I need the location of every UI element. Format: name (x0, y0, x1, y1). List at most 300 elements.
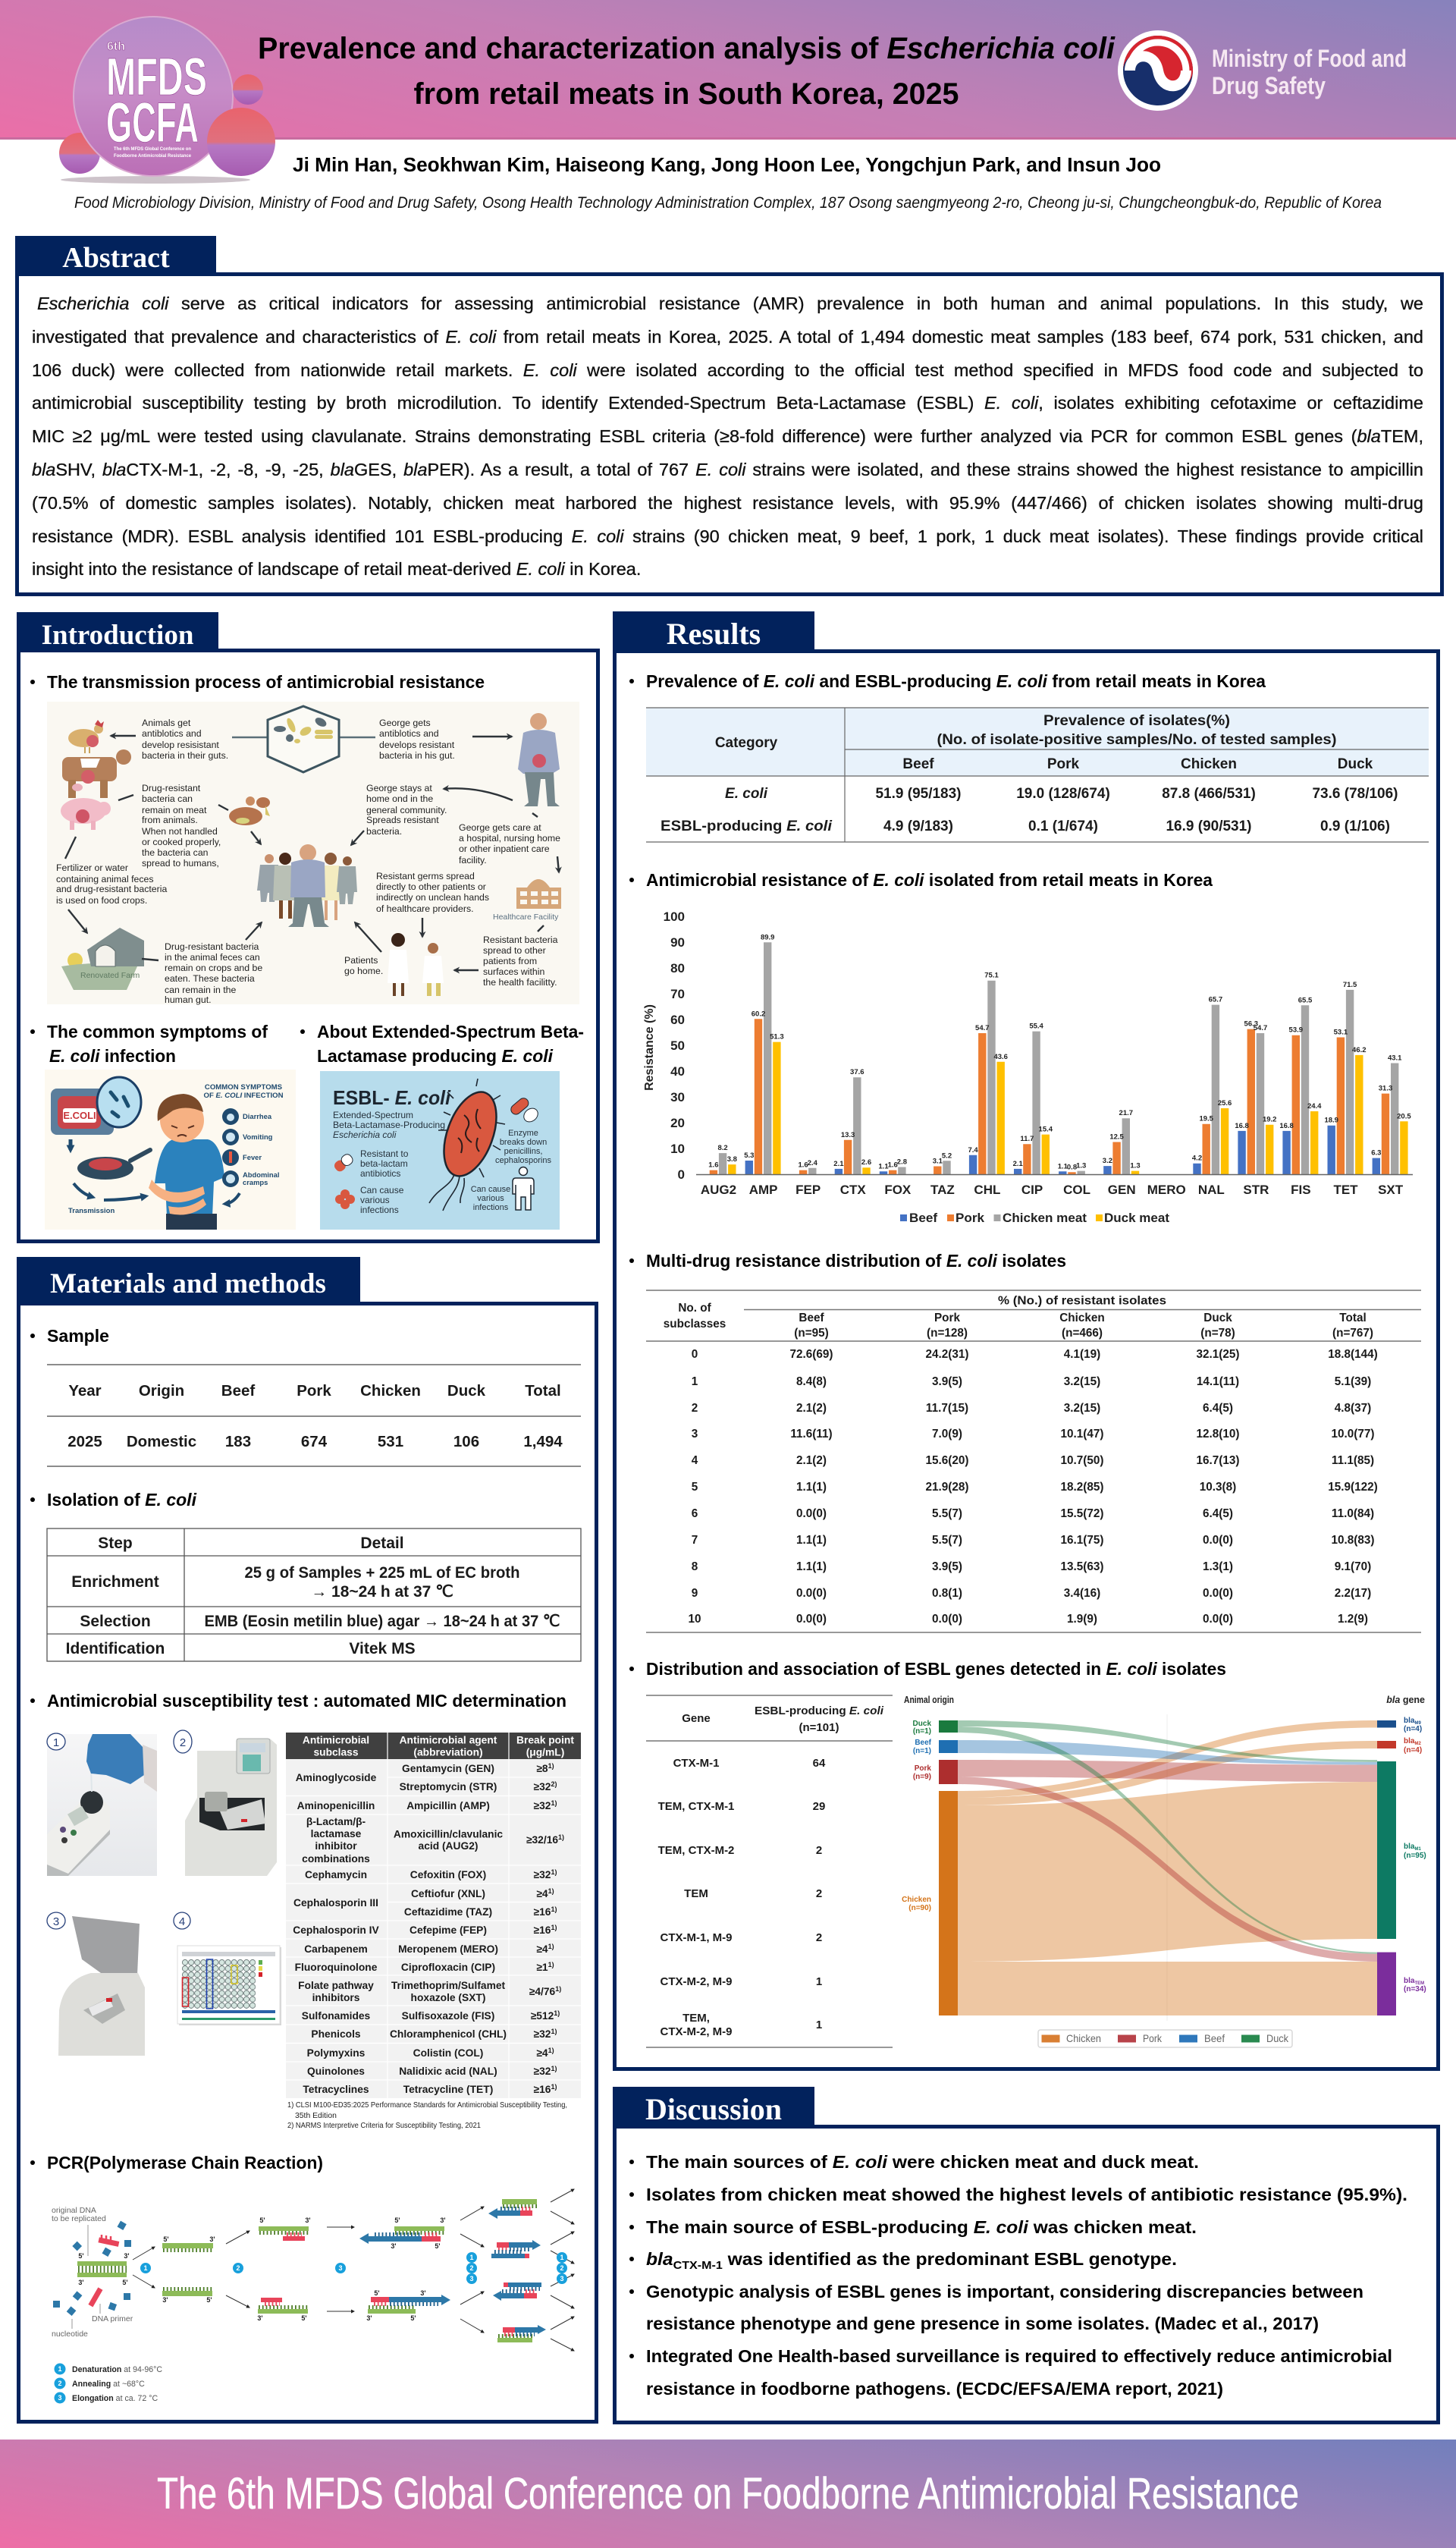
value labels: 1.1 (878, 1162, 889, 1170)
table: multi-drug resistance distribution: 24.2(31) (926, 1348, 968, 1361)
sankey left labels: (n=90) (908, 1904, 931, 1912)
symptoms list: Abdominal (243, 1170, 279, 1179)
category labels: CIP (1021, 1183, 1043, 1197)
table: ESBL genes: 2 (816, 1931, 822, 1944)
table: antimicrobial break points: ≥16 (534, 2084, 551, 2095)
table footnotes: 35th Edition (295, 2112, 337, 2120)
table: ESBL genes: 1 (816, 1975, 822, 1988)
sankey titles: bla gene (1386, 1695, 1425, 1705)
table: multi-drug resistance distribution: 3.2(15) (1064, 1402, 1100, 1415)
table: multi-drug resistance distribution: 5.1(39) (1335, 1375, 1371, 1388)
captions: transmission steps: George gets (379, 718, 431, 728)
table: prevalence of isolates: (No. of isolate-positive samples/No. of tested samples) (937, 732, 1336, 748)
table: prevalence of isolates: 73.6 (78/106) (1312, 786, 1398, 802)
category labels: MERO (1147, 1183, 1186, 1197)
value labels: 5.3 (744, 1151, 754, 1160)
value labels: 16.8 (1235, 1122, 1249, 1130)
value labels: 19.5 (1199, 1115, 1214, 1123)
table: multi-drug resistance distribution: Total (1339, 1312, 1367, 1324)
sankey right labels: bla (1404, 1737, 1414, 1745)
strand end labels: 5' (78, 2252, 84, 2260)
photo 2: sensititre dispenser (174, 1730, 277, 1876)
table: multi-drug resistance distribution: No. of (678, 1302, 712, 1315)
table: multi-drug resistance distribution: 11.0(84) (1332, 1507, 1374, 1520)
strand end labels: 5' (435, 2242, 441, 2250)
captions: transmission steps: When not handled (142, 826, 218, 837)
table: sample: Beef (221, 1382, 255, 1400)
PCR labels (52, 2206, 133, 2339)
DNA teeth: green (78, 2206, 537, 2336)
table: isolation steps: Identification (66, 1640, 165, 1657)
abstract text: MIC ≥2 μg/mL were tested using clavulanate. Strains demonstrating ESBL criteria (≥8-fold difference) were further analyzed via PCR for common ESBL genes (blaTEM, (32, 426, 1423, 446)
sankey left labels: Pork (915, 1764, 931, 1773)
authors: Ji Min Han, Seokhwan Kim, Haiseong Kang, Jong Hoon Lee, Yongchjun Park, and Insun Joo (293, 155, 1161, 176)
category labels: STR (1243, 1183, 1269, 1197)
abstract text: resistance (MDR). ESBL analysis identified 101 ESBL-producing E. coli strains (90 chicken meat, 9 beef, 1 pork, 1 duck meat isolates). These findings provide critical (32, 526, 1423, 546)
step badges: 3 (469, 2275, 474, 2283)
table: sample: Origin (139, 1382, 184, 1400)
table: antimicrobial break points: Phenicols (311, 2028, 361, 2040)
sankey right labels: M1 (1414, 1847, 1421, 1852)
PCR legend: Elongation at ca. 72 °C (72, 2394, 158, 2403)
table: antimicrobial break points: Gentamycin (GEN) (402, 1763, 494, 1774)
table: antimicrobial break points: 1) (548, 2047, 554, 2054)
icon: healthcare facility: Healthcare Facility (493, 913, 559, 922)
table: multi-drug resistance distribution: Beef (799, 1312, 824, 1324)
value labels: 6.3 (1371, 1149, 1381, 1158)
sankey right labels: bla (1404, 1717, 1414, 1725)
strand end labels: 3' (420, 2289, 426, 2297)
value labels: 2.4 (808, 1159, 818, 1167)
logo: conference wordmark (106, 40, 207, 159)
table: multi-drug resistance distribution: 11.1(85) (1332, 1454, 1374, 1467)
table: multi-drug resistance distribution: 0.0(0) (796, 1507, 827, 1520)
table: multi-drug resistance distribution: 6.4(5) (1203, 1507, 1233, 1520)
chart legend: Chicken meat (1003, 1211, 1087, 1225)
table: antimicrobial break points: 1) (548, 1943, 554, 1950)
icon: cow (62, 749, 131, 798)
logo: globe (74, 17, 233, 176)
value labels: 53.1 (1334, 1029, 1348, 1036)
number badge 2 (174, 1730, 192, 1753)
ESBL definition (333, 1110, 445, 1140)
value labels: 60.2 (752, 1010, 765, 1018)
table: antimicrobial break points: ≥32 (534, 1781, 551, 1792)
table: multi-drug resistance distribution: 9.1(70) (1335, 1560, 1371, 1573)
table: multi-drug resistance distribution: (n=128) (927, 1327, 968, 1340)
captions: transmission steps: can remain in the (165, 985, 236, 995)
value labels (708, 933, 1411, 1171)
icon: pills (509, 1096, 541, 1125)
table: multi-drug resistance distribution: 0.0(0) (796, 1587, 827, 1600)
photo 3: sensititre reader (47, 1912, 145, 2056)
sankey right labels: bla (1404, 1843, 1414, 1851)
table: multi-drug resistance distribution: 0.0(0) (1203, 1587, 1233, 1600)
value labels: 21.7 (1119, 1109, 1133, 1117)
panel: discussion (613, 2087, 1438, 2423)
value labels: 3.8 (727, 1155, 737, 1164)
table: multi-drug resistance distribution (646, 1290, 1421, 1632)
table: multi-drug resistance distribution: 8.4(8) (796, 1375, 827, 1388)
table: multi-drug resistance distribution: 4.1(19) (1064, 1348, 1100, 1361)
value labels: 53.9 (1289, 1026, 1303, 1035)
table: multi-drug resistance distribution: 2.1(2) (796, 1454, 827, 1467)
captions: transmission steps: or cooked properly, (142, 837, 221, 847)
step badges: 1 (560, 2254, 564, 2261)
ESBL right captions: breaks down (500, 1138, 547, 1147)
table: antimicrobial break points: ≥4/76 (529, 1986, 555, 1997)
y axis labels: 20 (670, 1116, 685, 1130)
table: antimicrobial break points: ≥512 (531, 2010, 554, 2022)
value labels: 37.6 (850, 1068, 864, 1076)
strand end labels: 5' (122, 2279, 128, 2286)
symptoms list: Vomiting (243, 1133, 273, 1141)
table: antimicrobial break points: 1) (548, 1961, 554, 1968)
value labels: 65.7 (1209, 996, 1222, 1004)
table: antimicrobial break points: Cephalosporin IV (293, 1924, 380, 1936)
title: from retail meats in South Korea, 2025 (414, 77, 959, 111)
ministry name: Ministry of Food and (1212, 45, 1407, 72)
table: antimicrobial break points: Amoxicillin/clavulanic (394, 1828, 503, 1840)
ESBL left captions: infections (360, 1205, 399, 1215)
sankey right labels: (n=4) (1404, 1746, 1422, 1755)
value labels: 46.2 (1352, 1046, 1367, 1054)
sankey right labels: bla (1404, 1977, 1414, 1985)
abstract text: insight into the resistance of landscape of retail meat-derived E. coli in Korea. (32, 559, 641, 579)
table: sample: Domestic (127, 1433, 196, 1450)
table: antimicrobial break points: Break point (516, 1734, 574, 1746)
sankey right labels: M9 (1414, 1721, 1421, 1726)
table: multi-drug resistance distribution: Pork (934, 1312, 960, 1324)
table: ESBL genes: TEM, (682, 2012, 710, 2025)
captions: transmission steps: patients from (483, 956, 537, 966)
table: multi-drug resistance distribution: 1 (692, 1375, 698, 1388)
table: prevalence of isolates: Category (715, 735, 778, 751)
table: ESBL genes: ESBL-producing E. coli (755, 1704, 884, 1717)
icon: healthcare facility (493, 879, 561, 922)
table: antimicrobial break points: Ciprofloxacin (CIP) (401, 1962, 495, 1973)
PCR labels: nucleotide (52, 2330, 88, 2339)
infographic: transmission process (47, 702, 579, 1005)
arrows: transmission flow (65, 736, 559, 970)
value labels: 24.4 (1307, 1102, 1322, 1111)
captions: transmission steps: Fertilizer or water (56, 862, 128, 873)
heading: common symptoms: The common symptoms of (47, 1022, 268, 1042)
materials frame (17, 1257, 596, 2421)
captions: transmission steps: Animals get (142, 718, 191, 728)
sankey: animal origin to bla gene (902, 1695, 1426, 2047)
table: antimicrobial break points: Ceftazidime (TAZ) (404, 1906, 492, 1918)
table: multi-drug resistance distribution: 32.1(25) (1197, 1348, 1239, 1361)
table: antimicrobial break points: subclass (313, 1746, 359, 1758)
table: multi-drug resistance distribution: 2.1(2) (796, 1402, 827, 1415)
table: multi-drug resistance distribution: 16.7(13) (1197, 1454, 1239, 1467)
PCR legend: Denaturation at 94-96°C (72, 2365, 162, 2374)
PCR legend: 3 (58, 2394, 62, 2402)
number badge 1: 1 (53, 1736, 59, 1749)
sankey legend: Chicken (1066, 2032, 1101, 2044)
ESBL left captions (360, 1148, 409, 1215)
sankey right labels: M2 (1414, 1742, 1421, 1746)
ESBL right captions: various (477, 1194, 504, 1203)
affiliation: Food Microbiology Division, Ministry of Food and Drug Safety, Osong Health Technology Administration Complex, 187 Osong saengmyeong 2-ro, Cheong ju-si, Chungcheongbuk-do, Republic of Korea (74, 194, 1382, 212)
table: antimicrobial break points: 1) (551, 1799, 557, 1807)
captions: transmission steps: remain on meat (142, 805, 207, 815)
icon: pig (61, 798, 111, 830)
bars: pork (710, 1019, 1389, 1174)
captions: transmission steps: antiblotics and (379, 728, 439, 739)
table: antimicrobial break points: Streptomycin (STR) (400, 1781, 497, 1792)
table: sample: 1,494 (523, 1433, 563, 1450)
sankey right labels: (n=4) (1404, 1725, 1422, 1733)
number badge 2: 2 (180, 1736, 186, 1749)
step badges: 3 (560, 2275, 564, 2283)
category labels: TAZ (930, 1183, 955, 1197)
icon: George patient (518, 713, 560, 806)
table: antimicrobial break points: Fluoroquinolone (295, 1962, 378, 1973)
table: multi-drug resistance distribution: 15.9(122) (1328, 1481, 1378, 1494)
table: antimicrobial break points: Cefoxitin (FOX) (410, 1869, 486, 1880)
materials frame: Materials and methods (50, 1268, 326, 1299)
table: antimicrobial break points: Antimicrobial agent (400, 1734, 497, 1746)
table: isolation steps: Enrichment (71, 1573, 159, 1591)
number badge 4 (174, 1912, 190, 1929)
table footnotes: 2) NARMS Interpretive Criteria for Susceptibility Testing, 2021 (287, 2122, 481, 2130)
table: ESBL genes: 2 (816, 1887, 822, 1900)
table: multi-drug resistance distribution: 0.0(0) (796, 1613, 827, 1626)
table: antimicrobial break points: Aminoglycoside (296, 1772, 377, 1783)
step badges: 2 (560, 2264, 564, 2272)
table: multi-drug resistance distribution: (n=466) (1062, 1327, 1103, 1340)
symptoms list: Fever (243, 1153, 262, 1161)
table: antimicrobial break points: Trimethoprim/Sulfamet (391, 1980, 506, 1991)
table: antimicrobial break points: 1) (548, 1762, 554, 1770)
table: antimicrobial break points: β-Lactam/β- (306, 1816, 366, 1827)
value labels: 1.6 (708, 1161, 719, 1170)
category labels: CHL (974, 1183, 1000, 1197)
y axis labels: 100 (664, 910, 685, 924)
table: antimicrobial break points: ≥4 (536, 1943, 548, 1955)
table: isolation steps: → 18~24 h at 37 ℃ (311, 1583, 453, 1601)
sankey left labels: (n=9) (913, 1773, 931, 1781)
table: antimicrobial break points: inhibitors (312, 1992, 360, 2003)
ESBL definition: Extended-Spectrum (333, 1110, 413, 1120)
discussion bullets: bla (646, 2249, 673, 2269)
sankey legend (1038, 2030, 1292, 2047)
category labels: AMP (749, 1183, 777, 1197)
table: prevalence of isolates: Prevalence of isolates(%) (1043, 713, 1230, 729)
table: ESBL genes: CTX-M-2, M-9 (660, 1975, 733, 1988)
table: multi-drug resistance distribution: 0.0(0) (1203, 1613, 1233, 1626)
symptoms list: OF E. COLI INFECTION (203, 1092, 284, 1100)
table: sample: Chicken (360, 1382, 421, 1400)
captions: transmission steps: Resistant bacteria (483, 935, 558, 945)
logo: conference wordmark: GCFA (106, 91, 199, 154)
bars: beef (745, 1126, 1380, 1174)
strand end labels: 5' (259, 2217, 265, 2224)
ESBL definition: Beta-Lactamase-Producing (333, 1120, 445, 1130)
table: multi-drug resistance distribution: 2.2(17) (1335, 1587, 1371, 1600)
table: sample: Total (525, 1382, 561, 1400)
captions: transmission steps: directly to other patients or (376, 881, 486, 892)
step badges: 3 (338, 2264, 343, 2272)
value labels: 51.3 (770, 1033, 784, 1042)
icon: meat (229, 796, 270, 825)
category labels: COL (1063, 1183, 1090, 1197)
table: antimicrobial break points: Ampicillin (AMP) (406, 1800, 490, 1811)
table: multi-drug resistance distribution: 5.5(7) (932, 1507, 962, 1520)
table: multi-drug resistance distribution: 10.0(77) (1332, 1428, 1374, 1441)
discussion bullets: resistance in foodborne pathogens. (ECDC/EFSA/EMA report, 2021) (646, 2379, 1223, 2399)
value labels: 19.2 (1263, 1116, 1276, 1124)
discussion bullets: CTX-M-1 (673, 2259, 723, 2272)
sankey right labels: (n=34) (1404, 1985, 1426, 1993)
value labels: 89.9 (761, 933, 774, 941)
icon: person (513, 1167, 534, 1210)
table: multi-drug resistance distribution: (n=78) (1200, 1327, 1235, 1340)
category labels: NAL (1198, 1183, 1225, 1197)
value labels: 3.1 (933, 1158, 943, 1165)
value labels: 65.5 (1298, 996, 1313, 1004)
captions: transmission steps: bacteria in their guts. (142, 750, 228, 761)
table: antimicrobial break points: Quinolones (307, 2066, 365, 2077)
value labels: 2.8 (897, 1158, 907, 1167)
table: prevalence of isolates: ESBL-producing E. coli (661, 818, 833, 834)
step badges: 2 (469, 2264, 474, 2272)
y axis title: Resistance (%) (643, 1004, 656, 1091)
table: antimicrobial break points (286, 1733, 581, 2098)
y axis labels: 80 (670, 961, 685, 976)
number badge 4: 4 (179, 1915, 185, 1928)
table: antimicrobial break points: hoxazole (SXT) (411, 1992, 485, 2003)
value labels: 20.5 (1397, 1112, 1411, 1120)
table: antimicrobial break points: ≥32/16 (526, 1834, 558, 1846)
heading: transmission process: The transmission process of antimicrobial resistance (47, 672, 485, 692)
value labels: 12.5 (1109, 1133, 1125, 1141)
table: ESBL genes: 2 (816, 1844, 822, 1857)
table: ESBL genes: Gene (682, 1712, 711, 1725)
table: multi-drug resistance distribution: 4 (692, 1454, 698, 1467)
table: antimicrobial break points: Folate pathway (298, 1980, 374, 1991)
table: ESBL genes (646, 1695, 893, 2047)
icon: magnifier bacteria (97, 1077, 141, 1127)
table: multi-drug resistance distribution: 16.1(75) (1061, 1534, 1103, 1547)
table: antimicrobial break points: 1) (551, 1906, 557, 1913)
y axis labels: 60 (670, 1013, 685, 1027)
table: antimicrobial break points: ≥1 (536, 1962, 548, 1973)
value labels: 18.9 (1324, 1117, 1338, 1125)
taegeuk emblem (1118, 30, 1198, 111)
icon: patients (388, 933, 444, 996)
table: ESBL genes: 1 (816, 2019, 822, 2031)
table: antimicrobial break points: Nalidixic acid (NAL) (399, 2066, 497, 2077)
chart legend: Beef (909, 1211, 938, 1225)
panel: introduction (17, 612, 598, 1241)
table: multi-drug resistance distribution: 8 (692, 1560, 698, 1573)
icon: chicken (68, 720, 104, 753)
strand end labels: 3' (162, 2296, 168, 2304)
table: prevalence of isolates: Beef (902, 756, 934, 772)
table: antimicrobial break points: ≥32 (534, 2028, 551, 2040)
table: isolation steps (47, 1528, 581, 1661)
strand end labels (78, 2217, 446, 2322)
captions: transmission steps: human gut. (165, 994, 212, 1005)
table: multi-drug resistance distribution: 12.8(10) (1197, 1428, 1239, 1441)
logo: left droplet (59, 133, 100, 174)
value labels: 1.3 (1076, 1162, 1086, 1170)
table: multi-drug resistance distribution: 11.7(15) (926, 1402, 968, 1415)
table: multi-drug resistance distribution: 3.4(16) (1064, 1587, 1100, 1600)
strand end labels: 3' (305, 2217, 311, 2224)
table: antimicrobial break points: Meropenem (MERO) (398, 1943, 498, 1955)
table: multi-drug resistance distribution: 0.0(0) (1203, 1534, 1233, 1547)
table: antimicrobial break points: 1) (551, 2083, 557, 2091)
captions: transmission steps: Drug-resistant (142, 783, 201, 793)
strand end labels: 3' (391, 2242, 397, 2250)
captions: transmission steps: Drug-resistant bacteria (165, 941, 259, 952)
chart legend (900, 1211, 1170, 1225)
captions: transmission steps: George gets care at (459, 822, 541, 833)
heading: about ESBL: About Extended-Spectrum Beta- (317, 1022, 584, 1042)
icon: frying pan (71, 1139, 150, 1180)
table: antimicrobial break points: Ceftiofur (XNL) (411, 1888, 485, 1899)
strand end labels: 3' (209, 2235, 215, 2243)
table: multi-drug resistance distribution: % (No.) of resistant isolates (998, 1294, 1166, 1308)
table: multi-drug resistance distribution: 1.1(1) (796, 1560, 827, 1573)
ESBL right captions: Enzyme (508, 1129, 538, 1138)
value labels: 3.2 (1103, 1157, 1112, 1165)
value labels: 0.8 (1067, 1163, 1077, 1171)
discussion bullets: was identified as the predominant ESBL genotype. (723, 2249, 1177, 2269)
chart legend: Pork (956, 1211, 985, 1225)
abstract text: blaSHV, blaCTX-M-1, -2, -8, -9, -25, blaGES, blaPER). As a result, a total of 767 E. coli strains were isolated, and these strains showed the highest resistance to ampicillin (32, 460, 1423, 479)
discussion bullets: The main source of ESBL-producing E. coli was chicken meat. (646, 2217, 1197, 2237)
icon: renovated farm (61, 928, 144, 990)
introduction frame (17, 612, 598, 1241)
ministry name (1212, 45, 1407, 99)
icon: capsule (333, 1152, 354, 1173)
table: antimicrobial break points: Tetracycline (TET) (403, 2084, 493, 2095)
captions: transmission steps (56, 718, 560, 1005)
category labels: FEP (795, 1183, 821, 1197)
table: multi-drug resistance distribution: 1.1(1) (796, 1534, 827, 1547)
captions: transmission steps: eaten. These bacteria (165, 973, 255, 984)
table: ESBL genes: (n=101) (799, 1721, 839, 1734)
category labels: CTX (840, 1183, 866, 1197)
heading: multi-drug resistance: Multi-drug resistance distribution of E. coli isolates (646, 1251, 1066, 1271)
value labels: 43.6 (993, 1053, 1008, 1061)
value labels: 16.8 (1279, 1122, 1294, 1130)
header banner (0, 0, 1456, 140)
captions: transmission steps: go home. (344, 966, 383, 976)
captions: transmission steps: or other inpatient care (459, 844, 550, 854)
table: ESBL genes: CTX-M-1, M-9 (660, 1931, 733, 1944)
captions: transmission steps: bacteria in his gut. (379, 750, 455, 761)
table: prevalence of isolates: E. coli (725, 786, 768, 802)
sankey left labels: Chicken (902, 1896, 931, 1904)
value labels: 13.3 (841, 1131, 855, 1139)
icon: meat tray (51, 1089, 114, 1135)
icon: bacterium (429, 1079, 507, 1211)
results frame (613, 611, 1438, 2069)
ESBL definition: Escherichia coli (333, 1129, 397, 1140)
table: antimicrobial break points: Sulfonamides (302, 2010, 371, 2022)
strand end labels: 5' (206, 2296, 212, 2304)
sankey right labels (1404, 1717, 1426, 1993)
category labels (701, 1183, 1404, 1197)
table: multi-drug resistance distribution: 18.8(144) (1328, 1348, 1378, 1361)
sankey right labels: TEM (1414, 1981, 1424, 1986)
